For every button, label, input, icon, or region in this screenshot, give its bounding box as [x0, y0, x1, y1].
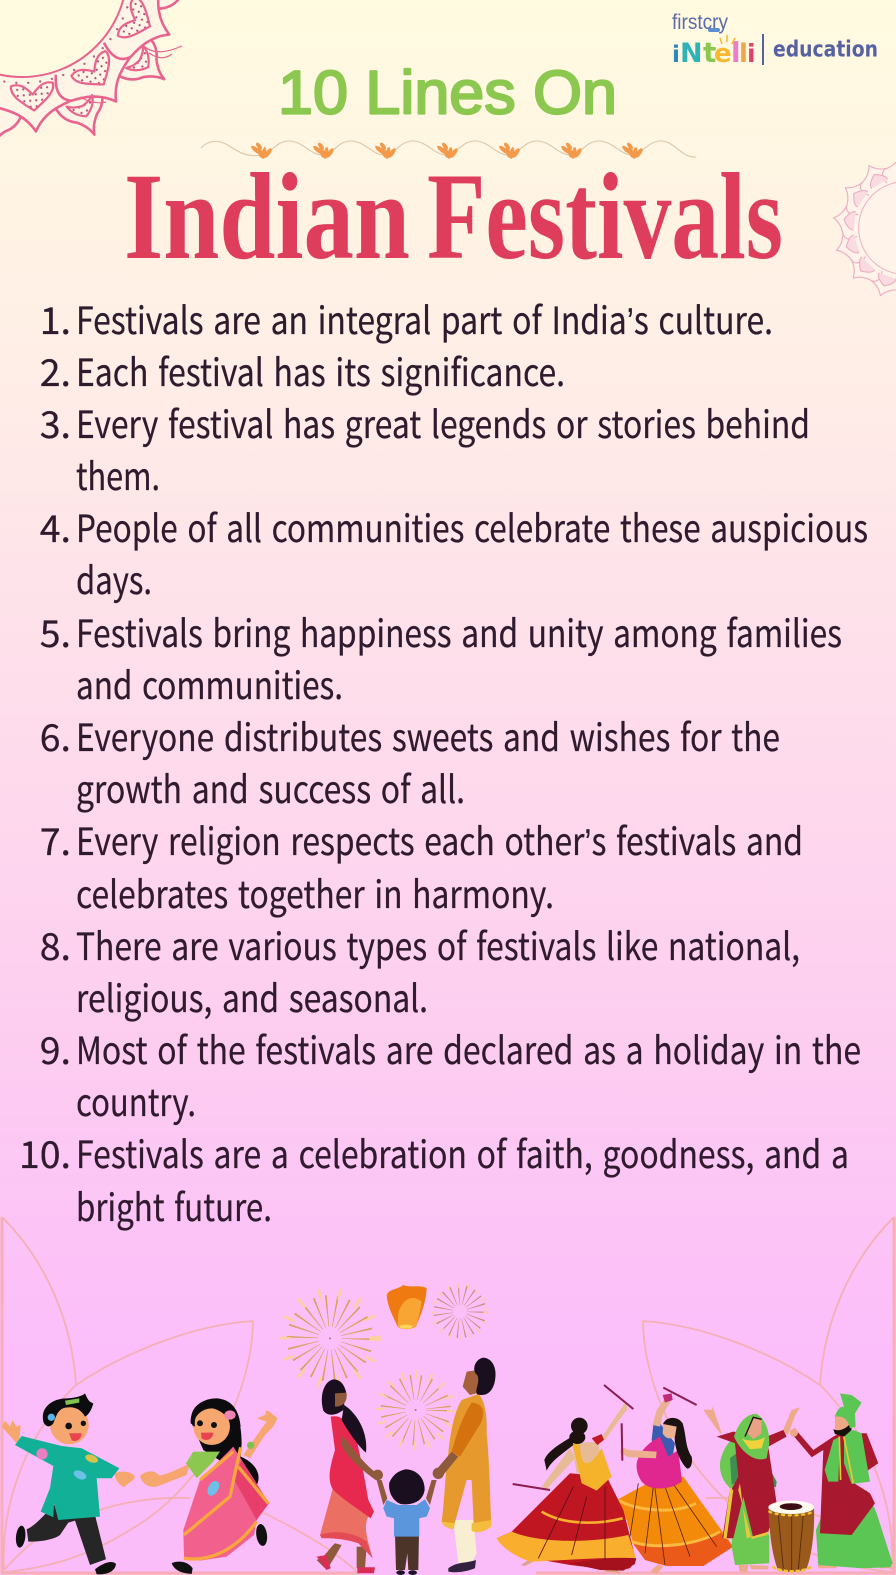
line 1: Festivals are an integral part of India’s culture.: [76, 290, 773, 345]
illustration: fireworks and sky lantern: [285, 1285, 486, 1446]
firework: large left: [285, 1293, 375, 1383]
line 1: 1.: [40, 290, 71, 345]
line 9: 9.: [40, 1020, 71, 1075]
line 9: [40, 1020, 861, 1127]
line 9: country.: [76, 1072, 196, 1127]
decoration: top-left mandala: [0, 0, 208, 152]
line 8: 8.: [40, 916, 71, 971]
figure: mother in red dress: [317, 1379, 383, 1573]
decoration: lotus outlines left: [2, 1217, 360, 1573]
logo: education wordmark: education: [773, 36, 878, 62]
figure: father in yellow kurta: [433, 1358, 496, 1572]
line 7: 7.: [40, 811, 71, 866]
icon: dhol drum: [768, 1501, 814, 1572]
figure: child in blue shirt: [377, 1469, 437, 1575]
line 5: [40, 603, 842, 710]
dancer: man with green turban: [790, 1393, 893, 1568]
line 5: and communities.: [76, 655, 343, 710]
line 2: 2.: [40, 342, 71, 397]
line 6: growth and success of all.: [76, 759, 465, 814]
line 2: Each festival has its significance.: [76, 342, 565, 397]
line 6: 6.: [40, 707, 71, 762]
logo: divider: [762, 34, 764, 65]
title: Indian Festivals: Indian: [124, 148, 410, 285]
firework: small right: [434, 1286, 486, 1338]
illustration: girl in pink sari: [140, 1398, 278, 1574]
line 6: Everyone distributes sweets and wishes for the: [76, 707, 780, 762]
logo: intelli wordmark: i: [672, 42, 680, 68]
logo: firstcry wordmark: firstcry: [672, 11, 728, 34]
line 8: [40, 916, 800, 1023]
line 4: days.: [76, 550, 152, 605]
line 4: 4.: [40, 498, 71, 553]
firework: middle: [380, 1374, 451, 1446]
logo: intelli wordmark: l: [739, 39, 748, 69]
title: Indian Festivals: Festivals: [427, 148, 783, 285]
logo: intelli wordmark: l: [731, 36, 741, 69]
line 10: [19, 1124, 849, 1232]
line 7: celebrates together in harmony.: [76, 864, 554, 919]
line 3: 3.: [40, 394, 71, 449]
logo: FirstCry Intelli education: [672, 11, 878, 69]
line 3: them.: [76, 446, 160, 501]
numbered list of ten lines: [19, 290, 868, 1232]
logo: intelli wordmark: e: [714, 39, 732, 69]
line 6: [40, 707, 780, 814]
line 8: religious, and seasonal.: [76, 968, 428, 1023]
divider: flower garland: [201, 141, 696, 159]
logo: intelli wordmark: i: [747, 39, 756, 68]
line 7: Every religion respects each other’s festivals and: [76, 811, 803, 866]
illustration: family watching fireworks: [317, 1358, 496, 1575]
decoration: lotus outlines right: [536, 1217, 894, 1573]
dancer: woman in green dupatta: [703, 1407, 800, 1572]
line 3: [40, 394, 810, 501]
line 10: bright future.: [76, 1177, 272, 1232]
line 4: [40, 498, 868, 605]
line 5: 5.: [40, 603, 71, 658]
dancer: red lehenga: [497, 1385, 636, 1573]
dancer: orange lehenga: [617, 1388, 733, 1574]
illustration: garba dancers and bhangra couple with drum: [497, 1385, 893, 1574]
logo: intelli wordmark: t: [703, 36, 716, 69]
title: 10 Lines On: 10 Lines On: [278, 58, 617, 126]
illustration: boy playing Holi: [2, 1393, 135, 1574]
logo: intelli wordmark: N: [680, 38, 703, 69]
line 7: [40, 811, 803, 919]
line 10: 10.: [19, 1124, 71, 1179]
sky lantern: [387, 1285, 427, 1329]
decoration: right mandala: [831, 155, 896, 302]
